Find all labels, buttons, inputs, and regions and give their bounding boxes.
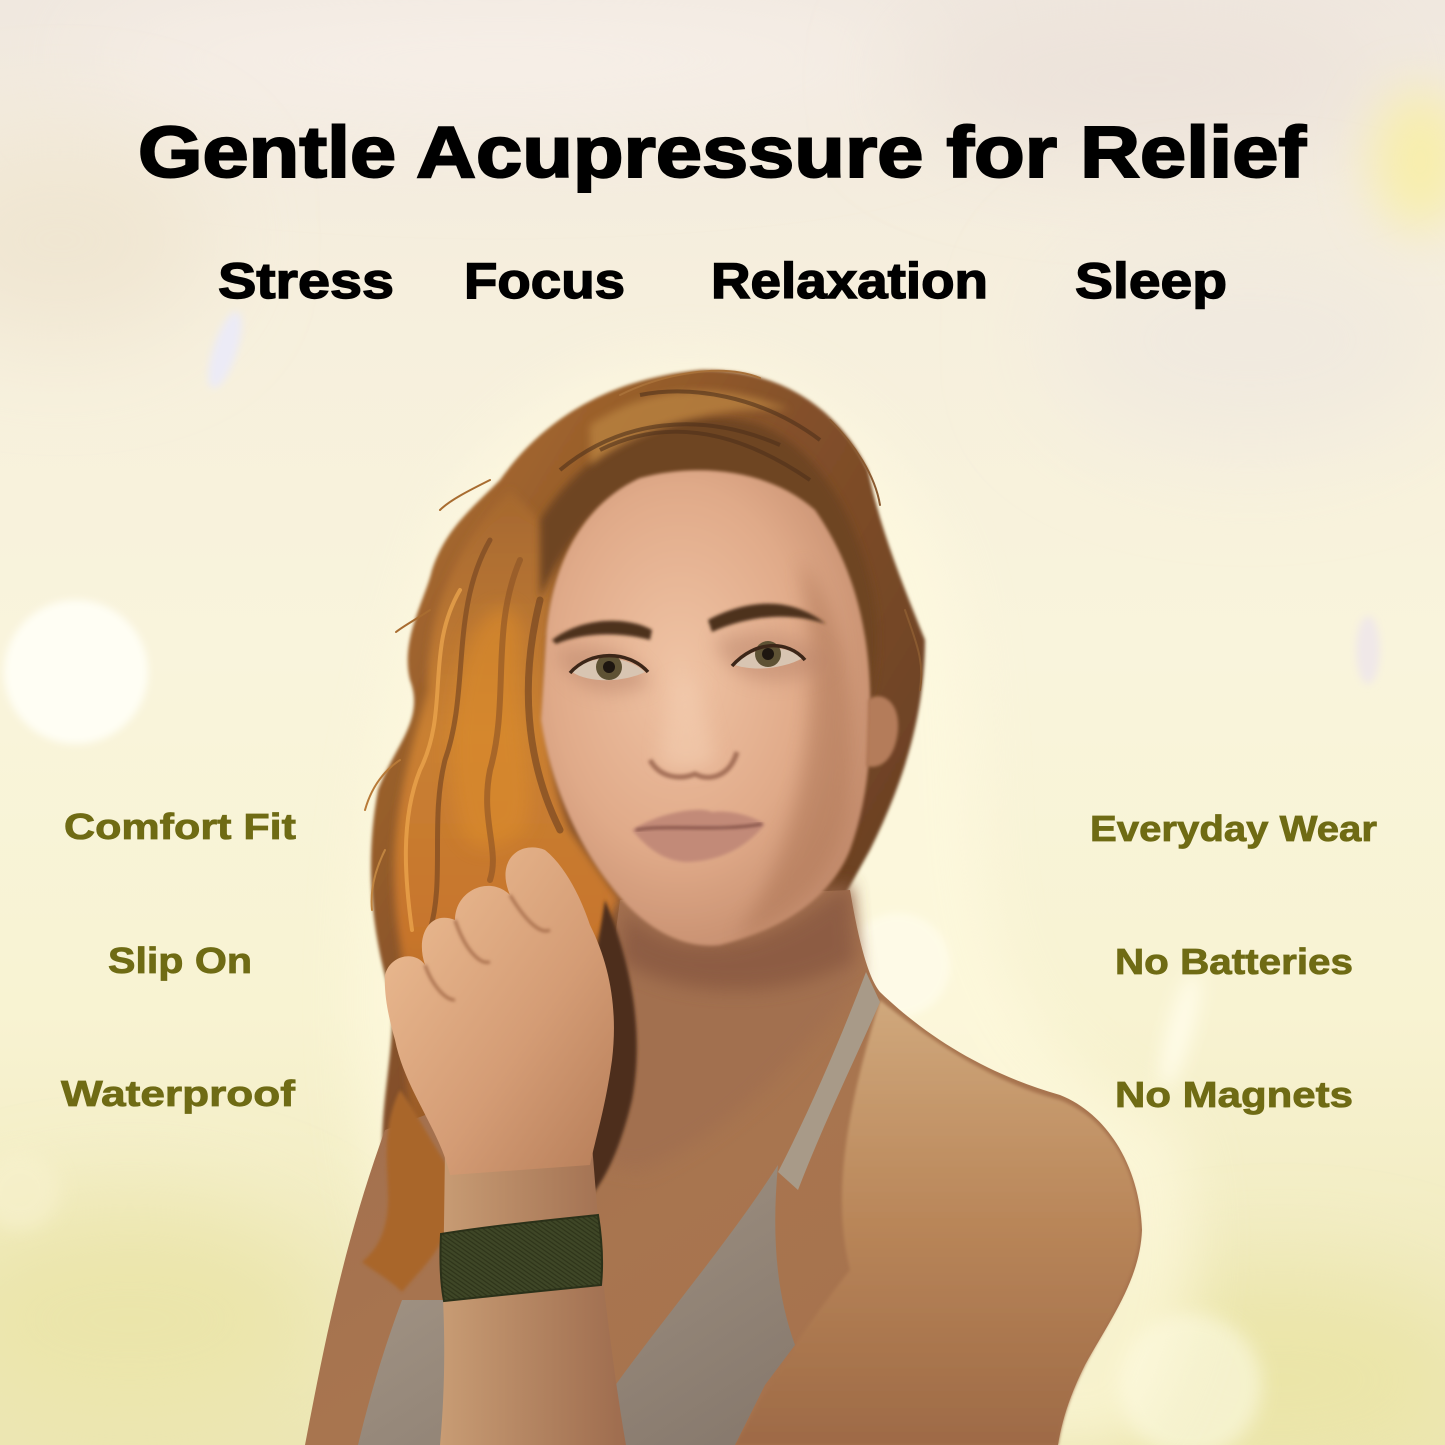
feature: comfort fit: Comfort Fit xyxy=(64,806,296,847)
woman photo illustration xyxy=(305,370,1142,1445)
title: Gentle Acupressure for Relief xyxy=(138,113,1307,193)
left features xyxy=(61,806,296,1114)
face right shade xyxy=(735,560,853,940)
benefit: sleep: Sleep xyxy=(1075,253,1227,309)
brows xyxy=(552,604,826,644)
shoulder highlight xyxy=(735,1000,1140,1445)
benefit: relaxation: Relaxation xyxy=(711,253,988,309)
feature: everyday wear: Everyday Wear xyxy=(1090,808,1377,849)
feature: no magnets: No Magnets xyxy=(1115,1074,1353,1115)
body base skin xyxy=(305,890,1142,1445)
hair top sweep xyxy=(540,418,878,700)
hair top highlight xyxy=(590,391,790,465)
face xyxy=(541,470,870,946)
feature: waterproof: Waterproof xyxy=(61,1073,296,1114)
hair top strands xyxy=(560,391,820,480)
feature: slip on: Slip On xyxy=(108,940,252,981)
nose underside xyxy=(650,752,737,777)
benefit: stress: Stress xyxy=(218,253,394,309)
eye socket shade xyxy=(555,632,830,693)
halter strap xyxy=(778,972,880,1190)
right features xyxy=(1090,808,1377,1115)
hair left glowing waves xyxy=(394,490,620,1180)
nose highlight xyxy=(660,680,715,769)
hair lock over back xyxy=(362,1090,450,1292)
neck shadow xyxy=(590,890,860,1170)
hair left highlight xyxy=(451,607,530,848)
left eye xyxy=(570,654,648,680)
hand xyxy=(385,847,614,1175)
hair back xyxy=(365,370,925,1290)
benefit row xyxy=(218,253,1227,309)
forearm xyxy=(440,1120,626,1445)
wristband xyxy=(440,1215,602,1301)
hair behind wrist xyxy=(580,900,637,1200)
chin shadow xyxy=(620,880,855,990)
benefit: focus: Focus xyxy=(464,253,625,309)
right eye xyxy=(732,641,805,669)
lips xyxy=(632,810,765,862)
lip line xyxy=(636,824,762,830)
feature: no batteries: No Batteries xyxy=(1115,941,1353,982)
hair strands xyxy=(365,371,921,930)
halter top xyxy=(358,1165,795,1445)
finger creases xyxy=(425,895,550,1000)
ear xyxy=(866,696,898,767)
